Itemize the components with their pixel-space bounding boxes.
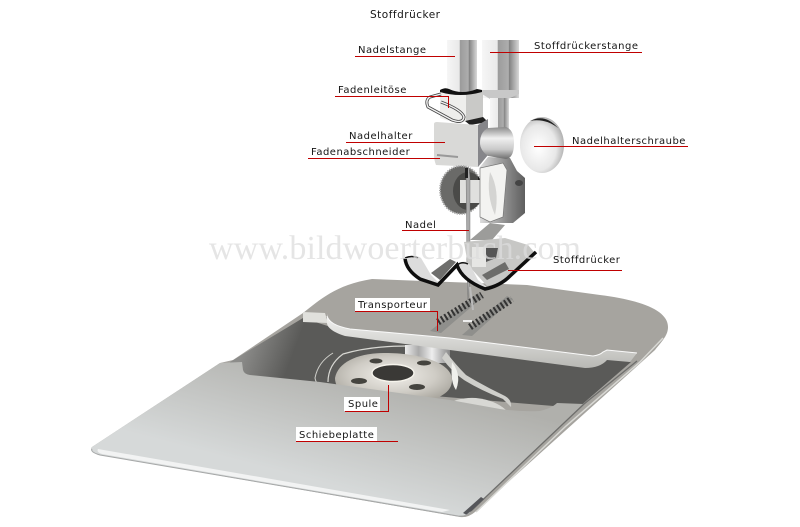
bobbin compartment bbox=[230, 318, 631, 408]
label: Transporteur: Transporteur bbox=[357, 300, 428, 311]
sliding plate assembly bbox=[91, 279, 668, 517]
foot shank bbox=[480, 157, 525, 223]
bobbin hook bbox=[442, 352, 511, 407]
plate right edge bbox=[471, 361, 637, 511]
raised lip of throat plate bbox=[327, 314, 637, 368]
foot ankle and sole bbox=[470, 223, 505, 240]
slide plate bbox=[91, 362, 583, 516]
throat plate bbox=[91, 279, 668, 517]
leader lines bbox=[308, 52, 688, 270]
left tab bbox=[303, 312, 328, 323]
label: Nadelhalterschraube: Nadelhalterschraube bbox=[572, 136, 686, 147]
label: Fadenabschneider: Fadenabschneider bbox=[311, 147, 411, 158]
label: Stoffdrücker: Stoffdrücker bbox=[553, 255, 621, 266]
plate front highlight bbox=[98, 449, 450, 512]
label: Nadelhalter: Nadelhalter bbox=[349, 131, 413, 142]
title: Stoffdrücker bbox=[370, 9, 441, 21]
needle bar bbox=[447, 40, 477, 92]
label: Stoffdrückerstange: Stoffdrückerstange bbox=[534, 41, 639, 52]
presser bar bbox=[482, 40, 519, 98]
label: Spule: Spule bbox=[348, 399, 378, 410]
thread guide bbox=[427, 94, 464, 121]
presser foot mechanism bbox=[405, 40, 564, 310]
label: Schiebeplatte: Schiebeplatte bbox=[299, 430, 374, 441]
knurled wheel bbox=[440, 166, 482, 214]
screw cylinder bbox=[480, 127, 514, 159]
bobbin bbox=[315, 345, 511, 410]
label: Fadenleitöse: Fadenleitöse bbox=[338, 85, 407, 96]
screw knob bbox=[520, 117, 564, 173]
collar bbox=[440, 90, 483, 122]
label: Nadelstange: Nadelstange bbox=[358, 45, 426, 56]
label: Spule bbox=[344, 385, 388, 412]
label: Schiebeplatte bbox=[296, 427, 398, 442]
label: Nadel: Nadel bbox=[405, 220, 436, 231]
feed dogs bbox=[430, 293, 513, 336]
left toe bbox=[405, 256, 440, 284]
bobbin disc bbox=[335, 353, 452, 402]
needle bbox=[466, 168, 470, 300]
needle clamp bbox=[434, 122, 478, 167]
watermark: www.bildwoerterbuch.com bbox=[209, 230, 581, 267]
right toe bbox=[457, 262, 488, 288]
label: Transporteur bbox=[355, 298, 438, 331]
foot black outline bbox=[405, 252, 536, 289]
